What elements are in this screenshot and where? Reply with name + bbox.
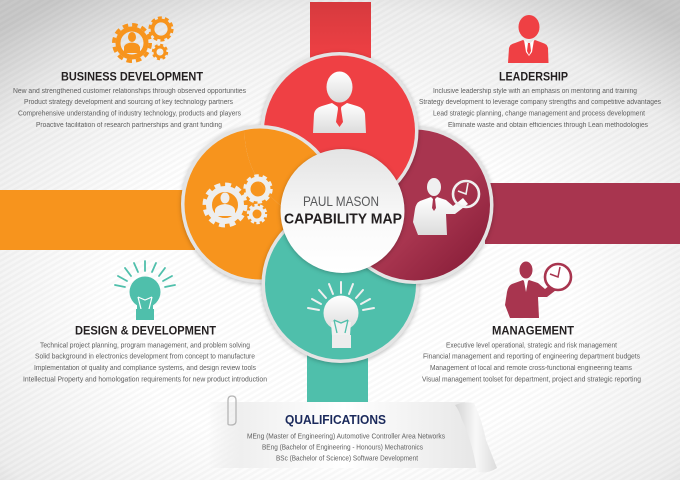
icon: red person (508, 15, 548, 63)
text block: Visual management toolset for department, project and strategic reporting (422, 376, 641, 384)
text block: Proactive facilitation of research partnerships and grant funding (36, 122, 222, 129)
panel: management (422, 262, 641, 384)
text block: Implementation of quality and compliance systems, and design review tools (34, 365, 256, 372)
center title: CAPABILITY MAP (284, 210, 402, 228)
bar: management maroon (485, 183, 680, 244)
icon: orange gears (114, 18, 172, 61)
text block: Solid background in electronics development from concept to manufacture (35, 354, 255, 360)
icon: teal bulb (115, 261, 175, 320)
text block: Management of local and remote cross-functional engineering teams (430, 365, 632, 372)
circle: business development orange (181, 125, 339, 283)
icon: white person (313, 72, 366, 133)
text block: Lead strategic planning, change management and process development (433, 110, 645, 118)
heading: BUSINESS DEVELOPMENT (61, 70, 204, 84)
capability diagram (181, 52, 494, 363)
circle overlap: orange over red (244, 125, 320, 206)
text block (419, 88, 661, 129)
center title: PAUL MASON (303, 193, 379, 209)
bar: leadership red (310, 2, 371, 58)
text block (247, 434, 445, 462)
text block: Executive level operational, strategic and risk management (446, 342, 617, 350)
text block (23, 342, 267, 384)
panel: leadership (419, 15, 661, 129)
heading: LEADERSHIP (499, 70, 568, 84)
panel: qualifications scroll (208, 396, 497, 472)
text block: BEng (Bachelor of Engineering - Honours) Mechatronics (262, 444, 423, 452)
circle: leadership red (260, 52, 418, 210)
text block: MEng (Master of Engineering) Automotive Controller Area Networks (247, 434, 445, 440)
icon: white manager with clock (413, 178, 479, 235)
center circle (280, 149, 404, 273)
center title (284, 193, 402, 228)
text block: New and strengthened customer relationships through observed opportunities (13, 88, 246, 95)
bar: design teal (307, 355, 368, 405)
text block: Product strategy development and sourcing of key technology partners (24, 99, 233, 106)
bar: business development orange (0, 190, 195, 250)
paper curl (455, 402, 497, 472)
panel: business development (13, 18, 246, 129)
text block: Intellectual Property and homologation requirements for new product introduction (23, 376, 267, 384)
icon: paper clip (228, 396, 236, 425)
text block (13, 88, 246, 129)
text block: Strategy development to leverage company strengths and competitive advantages (419, 99, 661, 106)
heading: MANAGEMENT (492, 324, 575, 338)
text block: Eliminate waste and obtain efficiencies through Lean methodologies (448, 122, 648, 129)
icon: maroon manager with clock (505, 262, 571, 318)
icon: white gears (204, 176, 271, 226)
circle: design teal (262, 205, 420, 363)
text block: Comprehensive understanding of industry technology, products and players (18, 110, 241, 118)
heading: DESIGN & DEVELOPMENT (75, 324, 217, 338)
text block: BSc (Bachelor of Science) Software Development (276, 456, 418, 462)
text block: Technical project planning, program management, and problem solving (40, 342, 250, 350)
heading: QUALIFICATIONS (285, 412, 386, 427)
paper sheet (208, 402, 480, 468)
text block: Financial management and reporting of engineering department budgets (423, 354, 640, 360)
text block (422, 342, 641, 384)
icon: white bulb (308, 282, 374, 348)
circle: management maroon (336, 126, 494, 284)
text block: Inclusive leadership style with an emphasis on mentoring and training (433, 88, 637, 95)
panel: design and development (23, 261, 267, 384)
